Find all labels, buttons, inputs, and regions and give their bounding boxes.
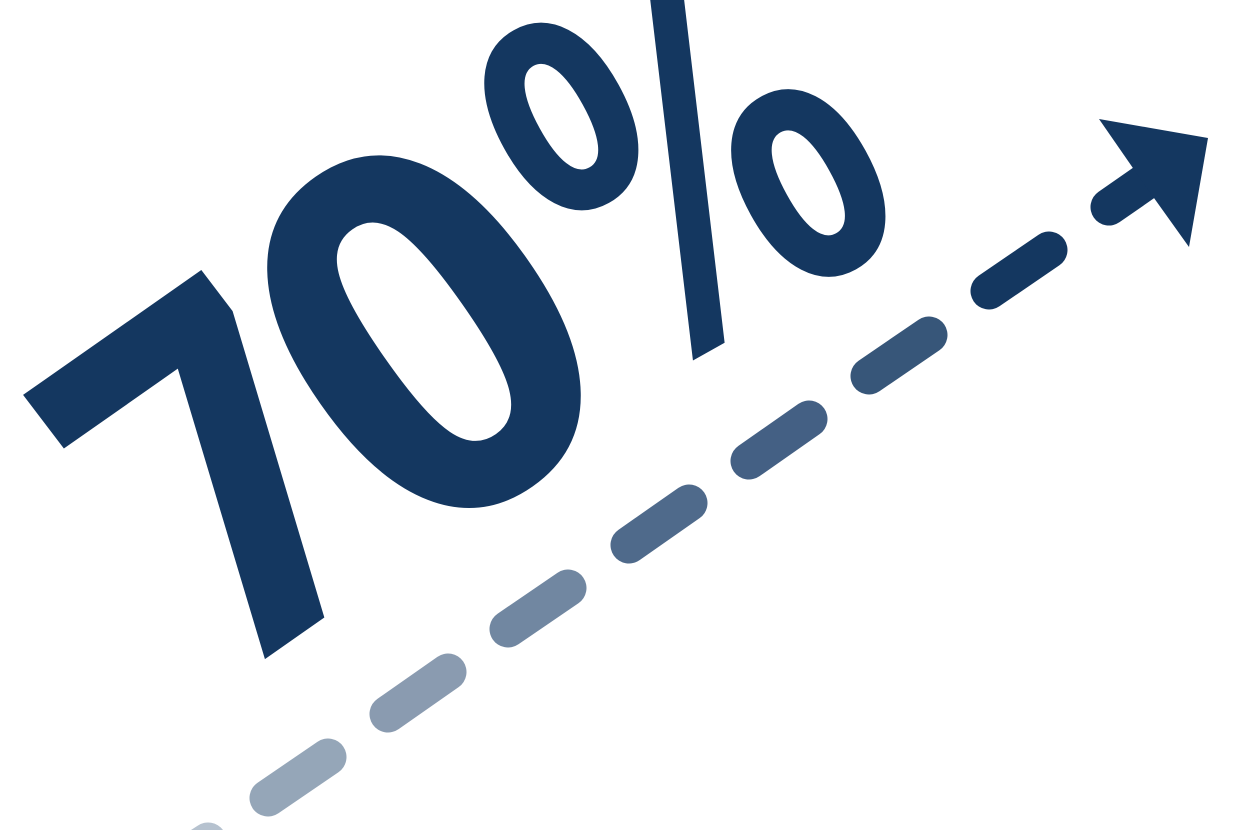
dash 1 [191,822,223,830]
dash 9 [1109,175,1155,207]
heading: 70% [0,0,976,785]
dash 8 [989,250,1049,291]
digit 0: 0 [142,17,716,661]
dash 3 [388,672,448,714]
arrow: rising dashed line with fading colour [191,175,1155,830]
arrowhead [1099,119,1208,247]
dash 4 [508,588,568,629]
dash 2 [268,757,328,798]
dash 7 [869,335,929,376]
dash 6 [749,419,809,461]
dash 5 [629,503,689,545]
